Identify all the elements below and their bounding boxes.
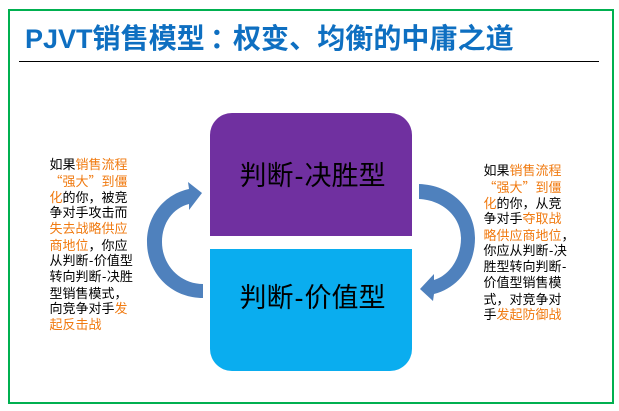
arrow: right curved arrow pointing down to value type xyxy=(419,184,475,301)
text block: left explanation: 化的你，被竞 xyxy=(50,187,128,206)
panel: judgment-value type xyxy=(210,249,412,371)
text block: right explanation xyxy=(484,163,575,322)
text block: right explanation: “强大”到僵 xyxy=(484,177,562,196)
text block: right explanation: 化的你，从竞 xyxy=(484,193,562,212)
text block: left explanation: 转向判断-决胜 xyxy=(50,269,133,284)
text block: left explanation: 从判断-价值型 xyxy=(50,253,133,268)
text block: right explanation: 争对手夺取战 xyxy=(484,211,562,226)
text block: left explanation: 起反击战 xyxy=(50,317,102,332)
text block: right explanation: 胜型转向判断- xyxy=(484,259,566,274)
text block: right explanation: 式，对竞争对 xyxy=(484,289,562,308)
text block: right explanation: 价值型销售模 xyxy=(484,275,562,290)
text block: left explanation: “强大”到僵 xyxy=(50,171,128,190)
text block: left explanation: 型销售模式， xyxy=(50,283,128,302)
text block: right explanation: 如果销售流程 xyxy=(484,163,562,178)
title: PJVT销售模型：权变、均衡的中庸之道 xyxy=(25,17,514,57)
text block: right explanation: 你应从判断-决 xyxy=(484,243,567,258)
text block: left explanation: 争对手攻击而 xyxy=(50,205,128,220)
text block: right explanation: 手发起防御战 xyxy=(484,307,562,322)
text block: left explanation xyxy=(50,157,133,332)
text block: right explanation: 略供应商地位， xyxy=(484,225,575,244)
panel: judgment-win type xyxy=(210,113,412,236)
text block: left explanation: 如果销售流程 xyxy=(50,157,128,172)
panel: judgment-value type: 判断-价值型 xyxy=(240,283,386,313)
panel: judgment-win type: 判断-决胜型 xyxy=(240,161,386,191)
text block: left explanation: 向竞争对手发 xyxy=(50,301,128,316)
arrow: left curved arrow pointing up to win type xyxy=(146,182,203,298)
title underline xyxy=(19,61,599,62)
text block: left explanation: 失去战略供应 xyxy=(50,221,128,236)
text block: left explanation: 商地位，你应 xyxy=(50,235,128,254)
